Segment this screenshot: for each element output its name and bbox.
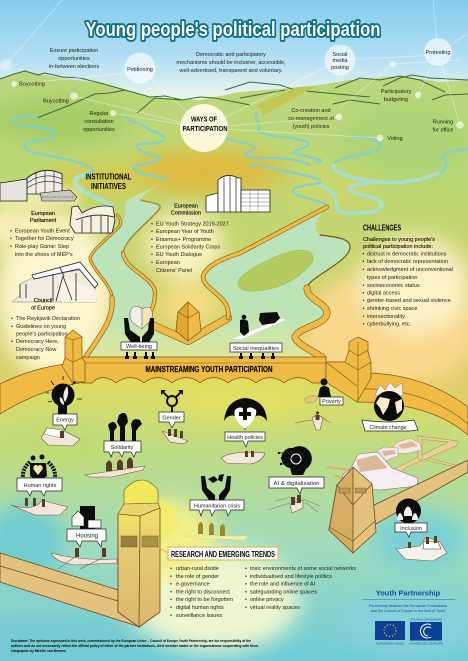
label: social inequalities: Social inequalities [233, 346, 279, 352]
panel: European Parliament: Together for Democracy [15, 236, 74, 242]
panel: challenges: Challenges to young people's [363, 237, 435, 243]
panel: research and emerging trends: • [170, 582, 172, 588]
label: health policies [225, 432, 265, 447]
bubble: left sky dot [0, 59, 12, 71]
label: AI and digitalisation: AI & digitalisation [274, 481, 320, 487]
panel: research and emerging trends: the right to be forgotten [176, 597, 233, 603]
boat: health policies [221, 451, 265, 464]
panel: European Commission: Commission [171, 210, 201, 216]
panel: research and emerging trends: urban-rural divide [176, 566, 219, 572]
disclaimer: Infographic by Mireille van Bremen [11, 648, 66, 653]
icon: health policies [224, 398, 267, 430]
title: Young people's political participation [86, 19, 380, 41]
ways of participation labels: Regular [89, 111, 109, 117]
panel: European Commission: European [156, 260, 180, 266]
logo: European Union: EUROPEAN UNION [376, 642, 404, 646]
ways of participation labels: mechanisms should be inclusive, accessible, [176, 60, 286, 66]
panel: research and emerging trends: • [170, 590, 172, 596]
label: health policies: Health policies [227, 435, 263, 441]
label: inclusion [395, 523, 427, 537]
icon: Council of Europe building [12, 262, 98, 302]
panel: Council of Europe: of Europe [31, 306, 55, 312]
panel: Council of Europe: Council [34, 298, 52, 304]
label: housing [67, 529, 106, 547]
ways of participation labels: budgeting [384, 97, 408, 103]
panel: research and emerging trends: • [170, 613, 172, 619]
ways of participation labels: opportunities [83, 127, 115, 133]
sky background [0, 0, 468, 100]
panel: research and emerging trends: • [170, 605, 172, 611]
figures under bridge left [125, 352, 155, 359]
centre tower [176, 302, 201, 341]
ways of participation labels: Participatory [381, 89, 412, 95]
panel: research and emerging trends: e-governance [176, 582, 210, 588]
disclaimer [11, 638, 259, 653]
ways of participation labels: co-management of [288, 116, 334, 122]
panel: research and emerging trends: • [245, 590, 247, 596]
panel: challenges: lack of democratic representation [367, 259, 448, 265]
panel: research and emerging trends: • [170, 597, 172, 603]
panel: European Commission: European Solidarity Corps [156, 244, 220, 250]
panel: research and emerging trends: RESEARCH AND EMERGING TRENDS [171, 550, 275, 559]
icon: European Parliament main building [0, 170, 80, 205]
panel: challenges [362, 224, 453, 328]
panel: European Parliament: Parliament [30, 218, 57, 224]
panel: challenges: types of participation [367, 275, 417, 281]
icon: gender [161, 390, 183, 414]
panel: challenges: socioeconomic status [367, 283, 420, 289]
logo: Council of Europe [409, 618, 443, 646]
panel: European Parliament: Role-play Game: Step [15, 244, 69, 250]
label: well-being [121, 342, 157, 350]
ways of participation labels: media [333, 58, 348, 64]
ways of participation labels: for office [432, 128, 454, 134]
boat: poverty [295, 411, 331, 430]
label: inclusion: Inclusion [400, 526, 422, 532]
bridge heading: MAINSTREAMING YOUTH PARTICIPATION [146, 365, 273, 374]
ways of participation labels: consultation [84, 119, 114, 125]
lower right tower [329, 467, 376, 553]
panel: challenges: • [362, 252, 364, 258]
panel: European Parliament: • [10, 228, 12, 234]
label: gender: Gender [162, 416, 181, 422]
panel: challenges: • [362, 322, 364, 328]
panel: research and emerging trends: • [170, 574, 172, 580]
disclaimer: Disclaimer: The opinions expressed in this work, commissioned by the European Union – Council of Europe Youth Partnership, are the responsibility of the [11, 638, 252, 643]
ways of participation badge: WAYS OF [191, 114, 217, 124]
panel: Council of Europe [11, 298, 80, 361]
ways of participation labels: Petitioning [127, 67, 153, 73]
moored yachts [327, 438, 422, 490]
icon: housing [72, 506, 101, 530]
panel: research and emerging trends: individualised and lifestyle politics [250, 574, 332, 580]
ways of participation labels: in-between elections [49, 64, 99, 70]
ways of participation labels: Protesting [426, 50, 450, 56]
panel: challenges: • [362, 306, 364, 312]
panel: European Commission: • [151, 244, 153, 250]
Youth Partnership block: and the Council of Europe in the field of Youth [371, 609, 445, 613]
panel: Council of Europe: Guidelines on young [16, 324, 66, 330]
panel: research and emerging trends: • [170, 566, 172, 572]
panel: challenges: • [362, 290, 364, 296]
icon: human rights [23, 454, 55, 484]
panel: challenges: • [362, 298, 364, 304]
boat: human rights [11, 498, 68, 515]
land background [0, 71, 468, 440]
panel: European Parliament: • [10, 236, 12, 242]
figures under bridge right [239, 353, 275, 359]
ways of participation labels: Democratic and participatory [196, 52, 266, 58]
connector lines [6, 0, 468, 138]
mountain ridges [0, 71, 468, 118]
ways of participation badge: PARTICIPATION [182, 124, 228, 133]
panel: European Parliament: European [31, 211, 55, 217]
icon: solidarity [108, 413, 142, 443]
panel: European Commission [151, 204, 229, 274]
logo: Council of Europe: COUNCIL OF EUROPE [410, 618, 442, 622]
label: AI and digitalisation [269, 477, 324, 494]
panel: challenges: acknowledgment of unconventional [367, 267, 453, 273]
panel: challenges: cyberbullying, etc. [367, 322, 411, 328]
Youth Partnership block: Youth Partnership [376, 588, 441, 598]
bridge: mainstreaming youth participation [82, 357, 326, 383]
panel: research and emerging trends: safeguarding online spaces [250, 590, 317, 596]
panel: European Commission: • [151, 260, 153, 266]
ways of participation labels: Voting [387, 136, 403, 142]
panel: challenges: • [362, 267, 364, 273]
label: energy: Energy [56, 418, 74, 424]
label: well-being: Well-being [126, 344, 152, 350]
panel: European Parliament: European Youth Event [15, 228, 70, 234]
lower left wall [0, 553, 140, 627]
ways of participation labels: Ensure participation [50, 48, 98, 54]
label: climate change: Climate change [370, 425, 406, 431]
boat: gender [162, 429, 188, 444]
icon: climate change [374, 382, 404, 421]
channel walls [85, 200, 350, 358]
rivers [13, 113, 468, 213]
bubble: petitioning [124, 52, 156, 84]
institutional initiatives heading: INSTITUTIONAL [86, 172, 132, 182]
ways of participation labels: Co-creation and [291, 108, 331, 114]
ways of participation labels [19, 48, 454, 142]
panel: research and emerging trends: the right to disconnect [176, 590, 230, 596]
panel: Council of Europe: people's participation [16, 332, 68, 338]
label: human rights: Human rights [24, 483, 57, 489]
label: solidarity [104, 441, 141, 457]
left bridge tower [62, 330, 85, 382]
panel: research and emerging trends: the role and influence of AI [250, 582, 316, 588]
icon: social inequalities [231, 312, 286, 340]
panel: Council of Europe: campaign [16, 355, 40, 361]
panel: challenges: political participation include: [363, 244, 433, 250]
disclaimer: authors and do not necessarily reflect the official policy of either of the partner institutions, their member states or the organisations cooperating with them. [11, 643, 259, 648]
panel: research and emerging trends: virtual reality spaces [250, 605, 300, 611]
icon: European Commission building [206, 175, 270, 212]
boat: energy [41, 428, 80, 446]
ways of participation badge [180, 104, 228, 152]
ways of participation labels: Running [433, 120, 453, 126]
boat: AI and digitalisation [268, 495, 320, 513]
institutional initiatives heading [86, 172, 132, 191]
panel: European Commission: • [151, 252, 153, 258]
panel: European Parliament [10, 211, 74, 258]
panel: research and emerging trends: • [245, 582, 247, 588]
boat: solidarity [85, 458, 145, 477]
label: poverty [320, 397, 343, 405]
panel: challenges: shrinking civic space [367, 306, 417, 312]
label: energy [53, 414, 77, 430]
left curved wall [0, 364, 84, 414]
harbour water [0, 380, 468, 661]
panel: research and emerging trends: digital human rights [176, 605, 224, 611]
panel: research and emerging trends: toxic environments of some social networks [250, 566, 356, 572]
panel: European Commission: EU Youth Dialogue [156, 252, 202, 258]
panel: European Parliament: into the shoes of MEP's [15, 252, 73, 258]
ways of participation labels: opportunities [58, 56, 90, 62]
bubble: social media posting [324, 44, 356, 76]
logo: Council of Europe: CONSEIL DE L'EUROPE [409, 642, 443, 646]
panel: research and emerging trends: the role of gender [176, 574, 219, 580]
panel: challenges: • [362, 283, 364, 289]
label: gender [159, 412, 184, 428]
ways of participation labels: posting [331, 65, 349, 71]
panel: research and emerging trends: • [245, 566, 247, 572]
ways of participation labels: (youth) policies [292, 124, 330, 130]
bubble: protesting [424, 38, 452, 66]
panel: research and emerging trends: online privacy [250, 597, 284, 603]
panel: challenges: digital access [367, 290, 400, 296]
panel: research and emerging trends: • [245, 574, 247, 580]
jetty [392, 436, 458, 472]
big lower left tower [118, 480, 178, 627]
panel: Council of Europe: • [11, 316, 13, 322]
boat: inclusion [396, 536, 447, 561]
label: housing: Housing [76, 534, 98, 540]
icon: well-being [124, 306, 154, 344]
panel: research and emerging trends [157, 547, 356, 619]
label: human rights [17, 478, 62, 496]
panel: European Commission: European [174, 204, 198, 210]
panel: European Commission: • [151, 222, 153, 228]
icon: energy [46, 376, 82, 414]
boat: housing [51, 548, 117, 569]
panel: challenges: • [362, 259, 364, 265]
institutional initiatives heading: INITIATIVES [91, 182, 127, 191]
right curved wall [357, 373, 468, 435]
panel: European Commission: Citizens' Panel [156, 268, 192, 274]
panel: European Commission: European Year of Youth [156, 229, 214, 235]
panel: Council of Europe: The Reykjavik Declaration [16, 316, 80, 322]
icon: inclusion [396, 498, 421, 524]
panel: European Commission: • [151, 237, 153, 243]
label: humanitarian crisis [190, 500, 244, 516]
Youth Partnership block [363, 588, 455, 646]
icon: humanitarian crisis [201, 474, 231, 500]
panel: European Commission: Erasmus+ Programme [156, 237, 211, 243]
connector dots [11, 61, 464, 141]
panel: challenges: CHALLENGES [363, 224, 401, 232]
panel: challenges: • [362, 314, 364, 320]
lagoon water between channels [85, 180, 350, 358]
boat: humanitarian crisis [185, 522, 248, 540]
panel: challenges: distrust in democratic institutions [367, 252, 447, 258]
icon: poverty [305, 378, 331, 403]
Youth Partnership block: Partnership between the European Commission [369, 604, 447, 608]
panel: European Commission: EU Youth Strategy 2019-2027 [156, 222, 229, 228]
label: solidarity: Solidarity [111, 445, 134, 451]
label: climate change [362, 420, 418, 431]
panel: research and emerging trends: • [245, 605, 247, 611]
ways of participation labels: Boycotting [19, 82, 45, 88]
panel: research and emerging trends: surveillance issues [176, 613, 222, 619]
ways of participation labels: well-advertised, transparent and voluntary. [178, 68, 283, 74]
panel: European Parliament: • [10, 244, 12, 250]
panel: Council of Europe: • [11, 339, 13, 345]
panel: Council of Europe: Democracy Here, [16, 339, 59, 345]
panel: Council of Europe: • [11, 324, 13, 330]
label: humanitarian crisis: Humanitarian crisis [194, 504, 240, 510]
lower right wall [370, 460, 468, 525]
icon: AI and digitalisation [278, 446, 312, 475]
icon: European Parliament second building [70, 206, 115, 233]
panel: European Commission: • [151, 229, 153, 235]
label: poverty: Poverty [322, 399, 341, 405]
panel: challenges: gender-based and sexual violence [367, 298, 451, 304]
panel: research and emerging trends: • [245, 597, 247, 603]
ways of participation labels: Social [333, 52, 347, 58]
right bridge tower [326, 337, 371, 402]
panel: Council of Europe: Democracy Now [16, 347, 56, 353]
ways of participation labels: Buycotting [43, 98, 69, 104]
label: social inequalities [230, 343, 282, 352]
panel: challenges: intersectionality [367, 314, 405, 320]
